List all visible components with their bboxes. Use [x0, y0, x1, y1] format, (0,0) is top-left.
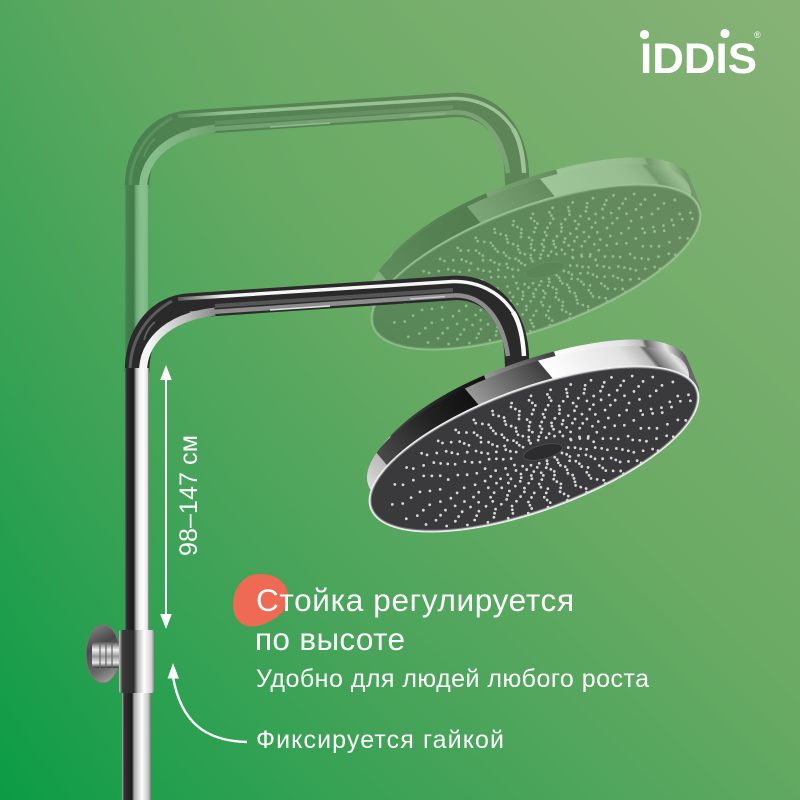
heading — [255, 582, 574, 657]
collar — [119, 630, 154, 693]
ghost shower head — [350, 130, 722, 384]
lower tube — [122, 690, 151, 800]
heading: Стойка регулируется — [256, 582, 574, 618]
height arrow — [160, 365, 172, 629]
red accent blob — [233, 574, 288, 626]
height label: 98–147 см — [175, 435, 203, 556]
heading: по высоте — [255, 621, 405, 657]
logo: ® — [754, 30, 761, 40]
shower head — [348, 312, 720, 566]
ghost pipe — [125, 98, 524, 485]
fixing nut — [86, 625, 121, 683]
chrome shower stand — [86, 281, 720, 800]
logo: IDDIS — [640, 35, 757, 83]
subheading: Удобно для людей любого роста — [256, 665, 649, 693]
curved arrow to nut — [168, 663, 247, 742]
ghost raised shower position — [125, 98, 722, 485]
nut caption: Фиксируется гайкой — [256, 726, 504, 754]
upper tube and arm — [125, 281, 524, 668]
